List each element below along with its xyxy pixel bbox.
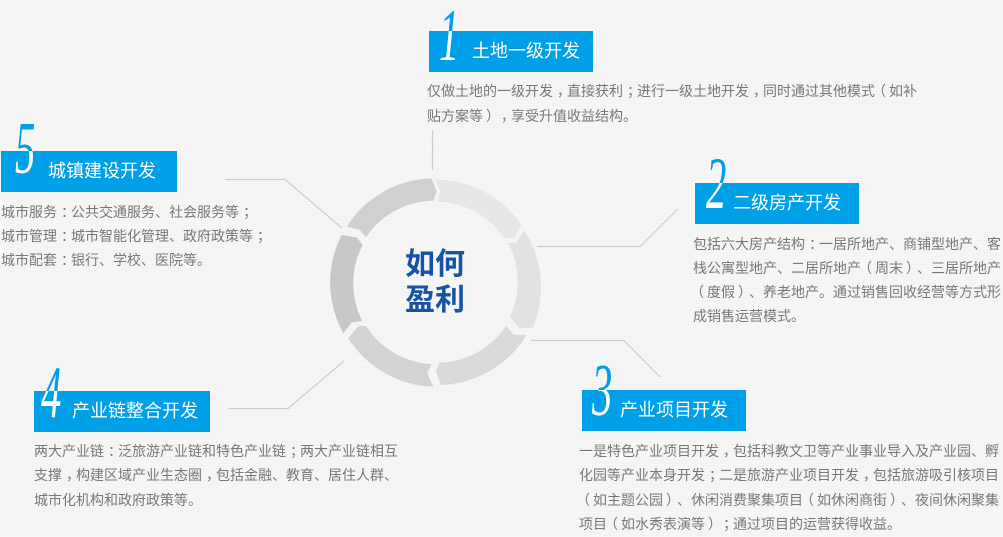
body text 3: （如主题公园）、休闲消费聚集项目（如休闲商街）、夜间休闲聚集 — [576, 492, 999, 508]
panel: 5 town development — [1, 107, 271, 268]
ring segment: right — [508, 230, 541, 328]
heading box 2 — [695, 183, 859, 224]
ring segment: bottom left — [348, 326, 433, 387]
body text 4: 城市化机构和政府政策等。 — [34, 492, 202, 508]
body text 2: 包括六大房产结构 ：一居所地产、商铺型地产、客 — [693, 236, 1001, 252]
body text 1 — [427, 83, 917, 124]
body text 5: 城市管理 ：城市智能化管理、政府政策等 ； — [1, 228, 271, 244]
panel: 1 land development — [427, 0, 917, 124]
heading 5: 城镇建设开发 — [48, 161, 156, 181]
numeral 2: 2 — [706, 142, 726, 224]
body text 4: 两大产业链 ：泛旅游产业链和特色产业链 ；两大产业链相互 — [34, 443, 398, 459]
body text 5: 城市服务 ：公共交通服务、社会服务等 ； — [1, 204, 257, 220]
ring segment: top right — [435, 179, 521, 238]
heading 2: 二级房产开发 — [733, 193, 841, 213]
panel: 4 industry chain integration — [34, 351, 398, 508]
numeral 4: 4 — [41, 351, 61, 433]
body text 5 — [1, 204, 271, 268]
body text 1: 贴方案等），享受升值收益结构。 — [427, 108, 637, 124]
heading 4: 产业链整合开发 — [72, 401, 198, 421]
body text 3: 项目（如水秀表演等）；通过项目的运营获得收益。 — [579, 516, 901, 532]
heading box 1 — [429, 31, 593, 72]
body text 2: 成销售运营模式。 — [693, 308, 805, 324]
body text 1: 仅做土地的一级开发 ，直接获利 ；进行一级土地开发 ，同时通过其他模式（如补 — [427, 83, 917, 99]
heading box 3 — [582, 390, 746, 431]
ring segment: top left — [347, 178, 437, 237]
panel: 2 secondary real estate — [690, 142, 1001, 324]
panel: 3 industry projects — [576, 349, 999, 532]
heading 1: 土地一级开发 — [472, 41, 580, 61]
heading 3: 产业项目开发 — [620, 400, 728, 420]
ring diagram — [330, 178, 541, 386]
ring segment: bottom right — [436, 326, 527, 385]
numeral 3: 3 — [591, 349, 612, 431]
center heading: 如何 — [405, 248, 465, 281]
body text 2: 栈公寓型地产、二居所地产（周末）、三居所地产 — [693, 260, 1001, 276]
body text 4 — [34, 443, 398, 508]
center heading — [405, 248, 465, 317]
numeral 5: 5 — [15, 107, 35, 189]
body text 2: （度假）、养老地产。通过销售回收经营等方式形 — [690, 284, 1001, 300]
body text 3: 化园等产业本身开发 ；二是旅游产业项目开发 ，包括旅游吸引核项目 — [579, 467, 999, 483]
body text 3 — [576, 443, 999, 532]
ring segment: left — [330, 235, 363, 333]
heading box 4 — [34, 391, 210, 432]
body text 4: 支撑 ，构建区域产业生态圈 ，包括金融、教育、居住人群、 — [34, 467, 398, 483]
center heading: 盈利 — [405, 284, 465, 317]
heading box 5 — [1, 151, 177, 192]
body text 3: 一是特色产业项目开发 ，包括科教文卫等产业事业导入及产业园、孵 — [579, 443, 999, 459]
body text 5: 城市配套 ：银行、学校、医院等。 — [1, 252, 211, 268]
body text 2 — [690, 236, 1001, 324]
